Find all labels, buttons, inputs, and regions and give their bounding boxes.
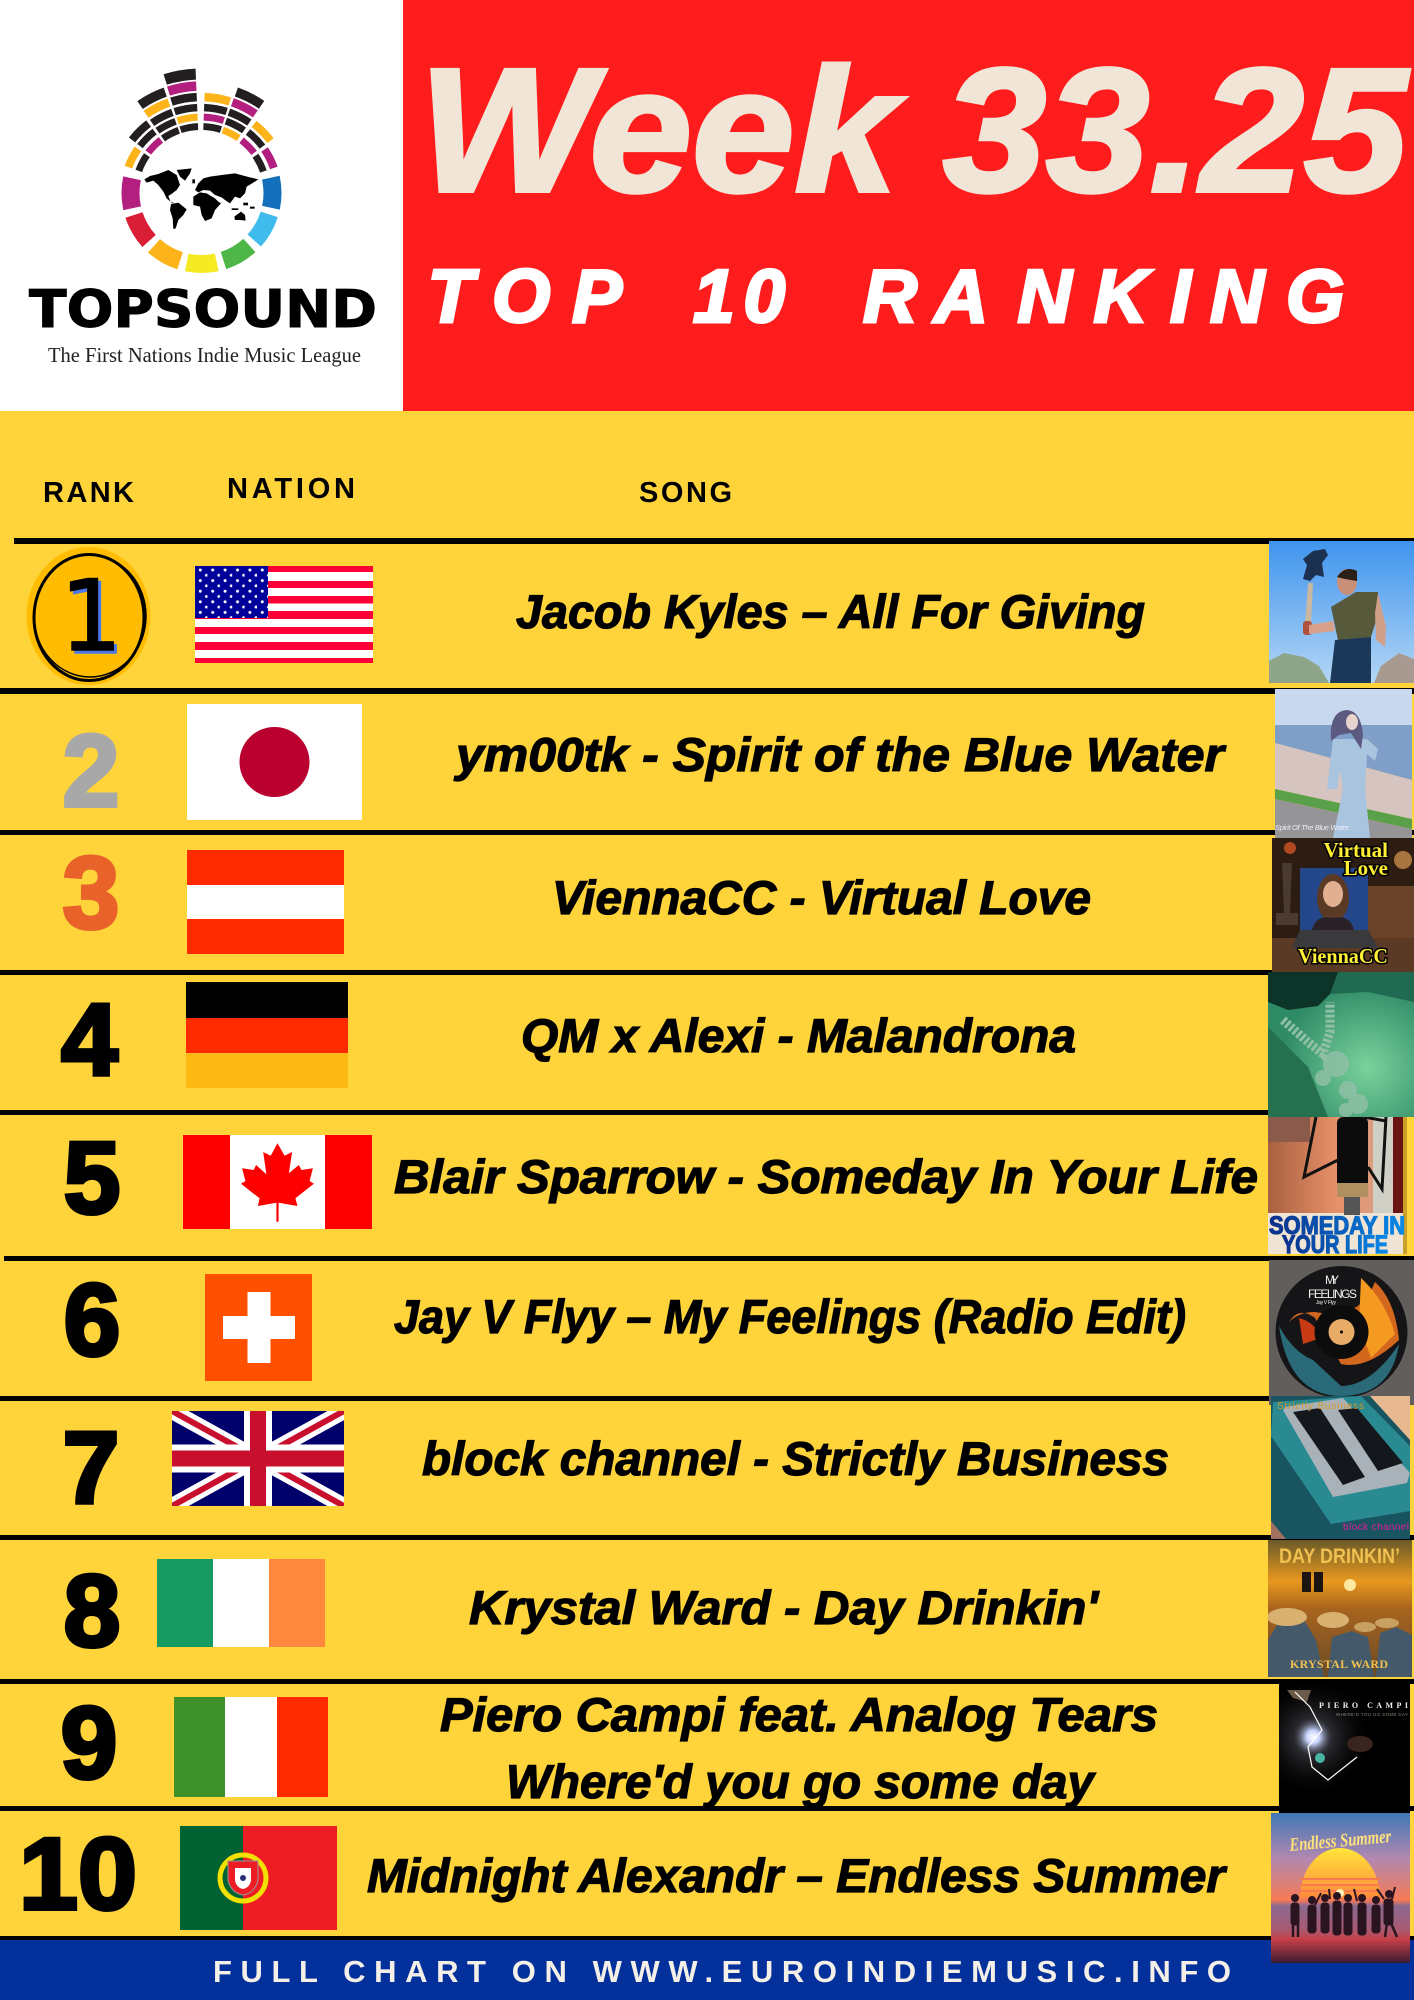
song title 3: ViennaCC - Virtual Love (552, 871, 1091, 924)
flag: Germany (186, 982, 348, 1088)
column heading: rank: RANK (43, 477, 134, 509)
art text: Jay V Flyy (1316, 1300, 1336, 1306)
row 8 (64, 1540, 1412, 1677)
rank 9: 9 (61, 1686, 117, 1800)
art text: WHERE'D YOU GO SOME DAY (1336, 1712, 1408, 1717)
song title 2: ym00tk - Spirit of the Blue Water (454, 728, 1227, 781)
panel: logo (0, 0, 403, 411)
icon: coloured ring (101, 93, 302, 293)
album art 3 (1272, 838, 1414, 972)
title: Week (419, 33, 905, 229)
art text: Strictly Business (1277, 1401, 1364, 1412)
rank 6: 6 (64, 1263, 120, 1377)
flag: Portugal (180, 1826, 337, 1930)
song title 9: Piero Campi feat. Analog Tears (440, 1688, 1158, 1741)
song title 5: Blair Sparrow - Someday In Your Life (394, 1150, 1258, 1203)
album art 1 (1269, 541, 1414, 683)
album art 9 (1279, 1684, 1410, 1813)
album art 8 (1268, 1540, 1412, 1677)
panel: title banner (403, 0, 1414, 411)
title: 33.25 (943, 33, 1409, 229)
art text: MY (1325, 1273, 1339, 1287)
flag: UK (172, 1411, 344, 1506)
album art 6 (1269, 1260, 1414, 1405)
song title 9: Where'd you go some day (506, 1755, 1097, 1808)
flag: USA (195, 566, 373, 663)
song title 1: Jacob Kyles – All For Giving (516, 585, 1145, 638)
album art 2 (1275, 689, 1412, 838)
album art 7 (1271, 1396, 1410, 1539)
row 9 (61, 1677, 1410, 1813)
row 1 (26, 541, 1414, 685)
rank badge 1: 1 (60, 560, 122, 674)
rank 5: 5 (64, 1121, 120, 1235)
column heading: nation: NATION (227, 473, 355, 505)
album art 2: Spirit Of The Blue Water (1275, 823, 1350, 832)
row 7 (63, 1396, 1410, 1539)
album art 10 (1271, 1813, 1410, 1963)
flag: Italy (174, 1697, 328, 1797)
art text: ViennaCC (1298, 944, 1388, 968)
logo tagline: The First Nations Indie Music League (48, 343, 361, 367)
row 3 (63, 836, 1414, 972)
rank badge 1 (26, 547, 150, 685)
icon: equalizer arcs (52, 44, 350, 342)
footer bar (0, 1940, 1414, 2000)
song title 6: Jay V Flyy – My Feelings (Radio Edit) (394, 1290, 1186, 1343)
art text: PIERO CAMPI (1319, 1701, 1408, 1710)
footer text: FULL CHART ON WWW.EUROINDIEMUSIC.INFO (213, 1954, 1231, 1989)
song title 7: block channel - Strictly Business (422, 1432, 1169, 1485)
row 4 (61, 972, 1414, 1117)
rank 3: 3 (63, 836, 119, 950)
row 2 (63, 689, 1412, 838)
song title 10: Midnight Alexandr – Endless Summer (367, 1849, 1228, 1902)
row 6 (64, 1260, 1414, 1405)
rank 2: 2 (63, 714, 119, 828)
flag: Ireland (157, 1559, 325, 1647)
album art 4 (1268, 972, 1414, 1117)
art text: block channel (1343, 1522, 1409, 1533)
column heading: song: SONG (639, 477, 732, 509)
art text: KRYSTAL WARD (1290, 1657, 1388, 1671)
album art 5 (1268, 1117, 1407, 1259)
art text: FEELINGS (1308, 1287, 1357, 1301)
song title 9 (440, 1688, 1158, 1808)
row 10 (19, 1813, 1410, 1963)
song title 4: QM x Alexi - Malandrona (521, 1009, 1076, 1062)
flag: Canada (183, 1135, 372, 1229)
rank 7: 7 (63, 1411, 119, 1525)
table header (43, 473, 732, 509)
logo wordmark: TOPSOUND (29, 280, 377, 340)
rank 8: 8 (64, 1554, 120, 1668)
rank 10: 10 (19, 1817, 137, 1931)
art text: Virtual (1323, 838, 1388, 862)
flag: Switzerland (205, 1274, 312, 1381)
subtitle: TOP 10 RANKING (428, 254, 1344, 338)
flag: Japan (187, 704, 362, 820)
flag: Austria (187, 850, 344, 954)
song title 8: Krystal Ward - Day Drinkin' (469, 1581, 1100, 1634)
rank 4: 4 (61, 983, 118, 1097)
art text: Love (1344, 856, 1388, 880)
row 5 (64, 1117, 1407, 1259)
icon: world map (144, 168, 258, 229)
title (419, 33, 1409, 229)
